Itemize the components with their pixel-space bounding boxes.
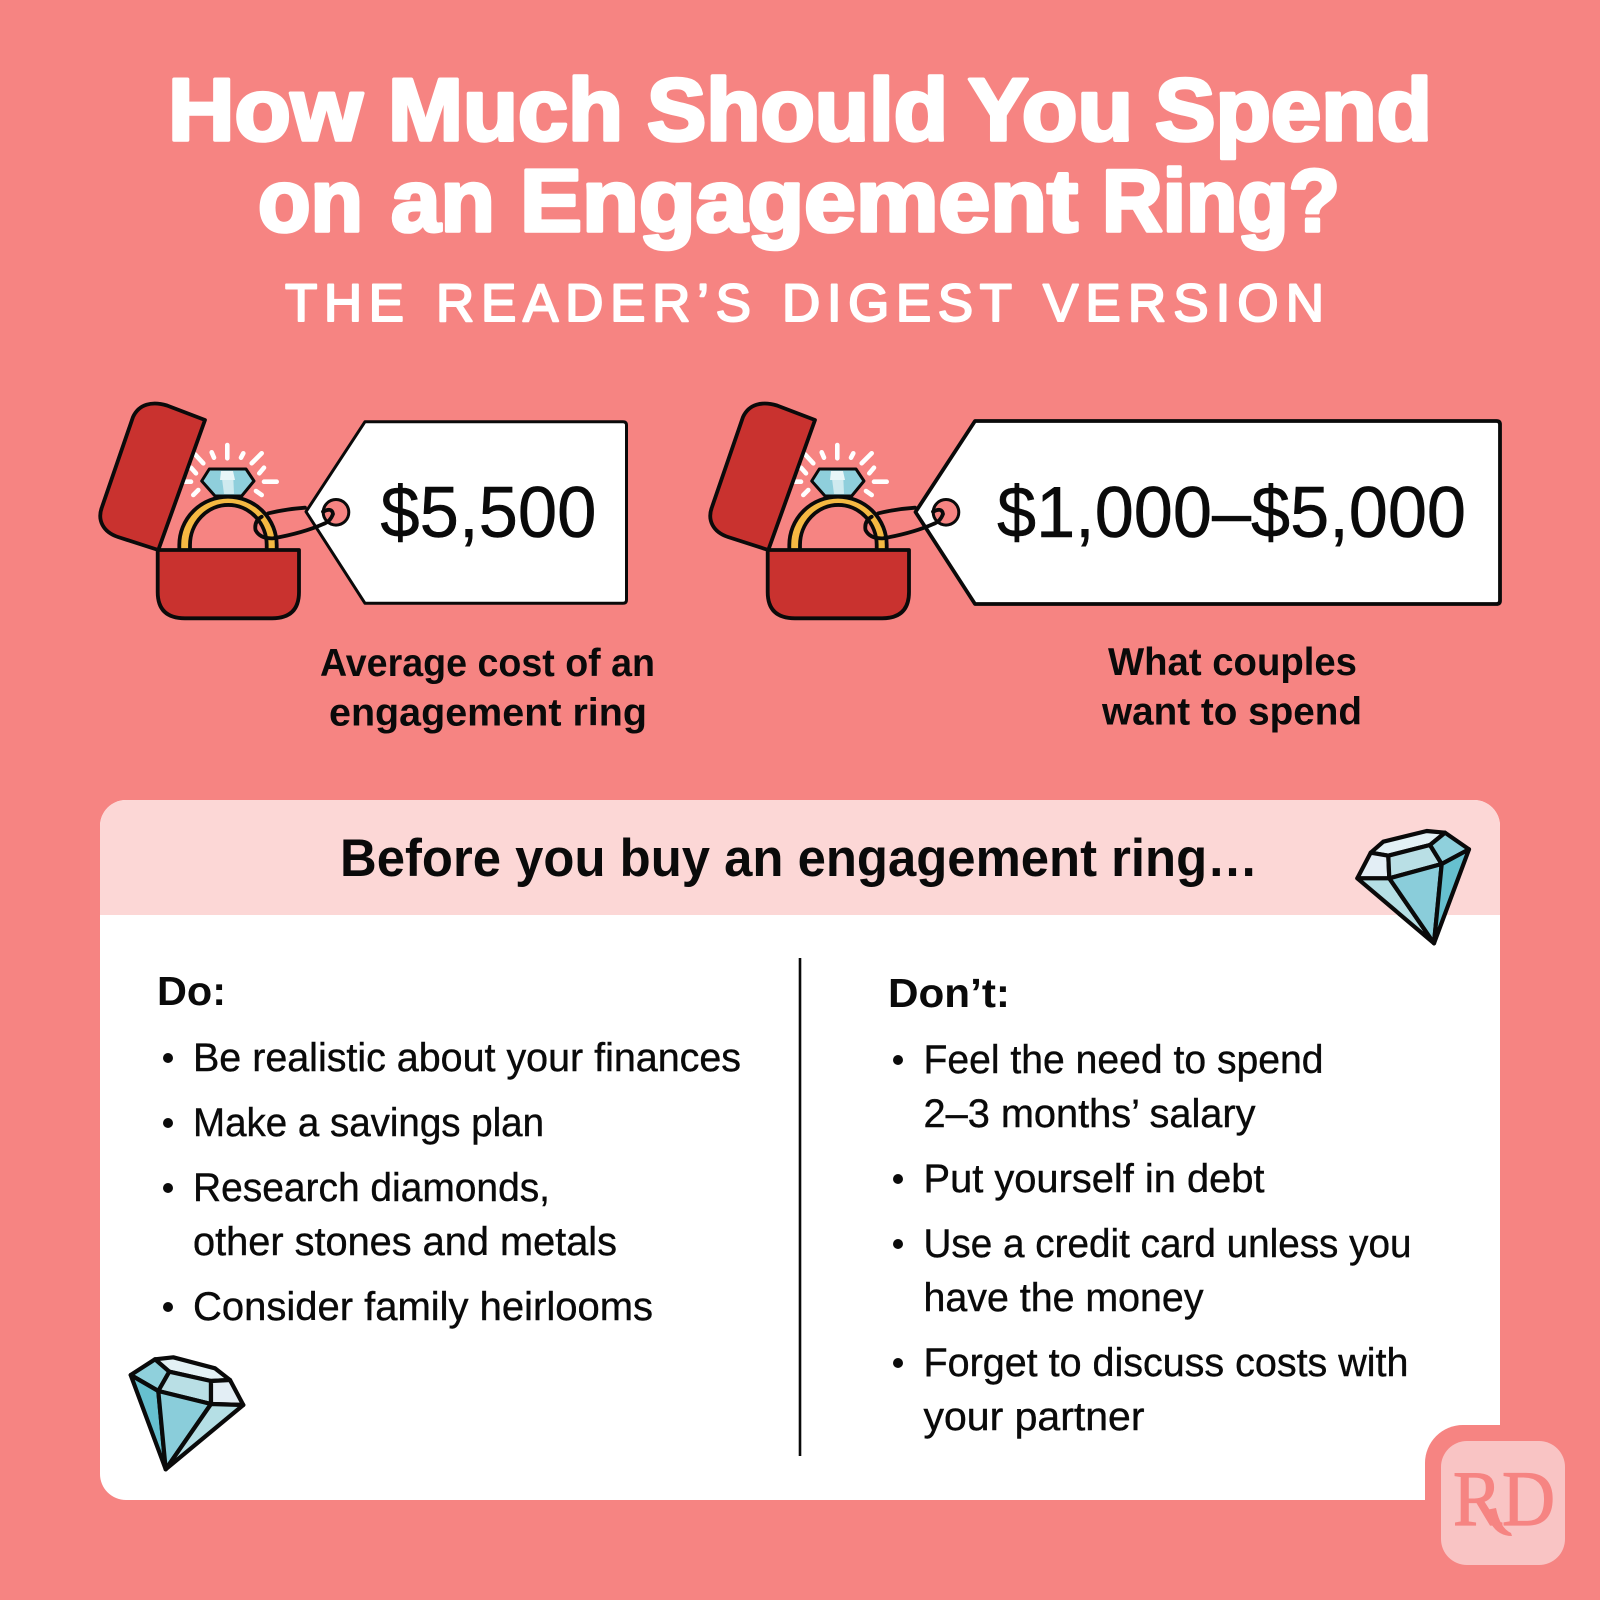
price tag: $1,000–$5,000: $1,000–$5,000 — [997, 473, 1466, 553]
label: average cost — [320, 642, 655, 734]
don't list: Use a credit card unless you — [924, 1222, 1412, 1266]
title: on — [258, 151, 363, 250]
logo notch — [1425, 1425, 1500, 1500]
label: average cost: engagement ring — [329, 692, 647, 734]
do list: Be realistic about your finances — [193, 1036, 741, 1080]
panel: before you buy — [100, 800, 1500, 1500]
icon: diamond bottom left — [131, 1357, 243, 1469]
sparkles — [185, 445, 277, 495]
don't list: Feel the need to spend — [924, 1038, 1324, 1082]
column: don't — [888, 970, 1412, 1439]
ring box base — [768, 550, 909, 618]
subtitle: VERSION — [1043, 274, 1324, 333]
subtitle: DIGEST — [782, 274, 1012, 333]
do list: Research diamonds, — [193, 1166, 550, 1210]
upper tag string — [268, 508, 305, 513]
label: what couples want to spend — [1101, 641, 1362, 734]
ring box lid — [100, 404, 205, 550]
label: what couples want to spend: want to spend — [1101, 690, 1362, 734]
do list: Make a savings plan — [193, 1101, 544, 1145]
subtitle: READER’S — [436, 274, 751, 333]
title: You — [968, 60, 1133, 159]
don't list: Forget to discuss costs with — [924, 1341, 1408, 1385]
icon: diamond top right — [1357, 831, 1469, 943]
price tag: $5,500 — [255, 422, 626, 603]
label: average cost: Average cost of an — [320, 642, 655, 685]
label: what couples want to spend: What couples — [1108, 641, 1357, 684]
logo: RD: RD — [1453, 1455, 1555, 1542]
icon: ring box with price tag, average cost — [100, 404, 305, 618]
title: Engagement — [520, 151, 1078, 250]
price tag: $1,000–$5,000 — [865, 421, 1500, 604]
title: Spend — [1155, 60, 1432, 159]
title: How — [168, 60, 363, 159]
title: Should — [647, 60, 948, 159]
logo: RD — [1441, 1441, 1565, 1565]
sparkles — [795, 445, 887, 495]
title: Much — [388, 60, 623, 159]
do list — [163, 1036, 741, 1329]
subtitle: THE — [285, 274, 404, 333]
icon: ring box with price tag, what couples want — [710, 404, 915, 618]
don't list: have the money — [924, 1276, 1204, 1320]
do heading: Do: — [157, 968, 226, 1014]
panel body — [100, 800, 1500, 1500]
do list: Consider family heirlooms — [193, 1285, 653, 1329]
don't list: your partner — [924, 1395, 1144, 1439]
ring box lid — [710, 404, 815, 550]
gold ring band — [789, 497, 887, 552]
column divider — [799, 958, 801, 1456]
title: Ring? — [1102, 151, 1340, 250]
don't list: Put yourself in debt — [924, 1157, 1265, 1201]
do list: other stones and metals — [193, 1220, 617, 1264]
ring box base — [158, 550, 299, 618]
gold ring band — [179, 497, 277, 552]
don't heading: Don’t: — [888, 970, 1010, 1016]
don't list: 2–3 months’ salary — [924, 1092, 1256, 1136]
title: an — [391, 151, 495, 250]
price tag: $5,500: $5,500 — [380, 473, 596, 553]
title — [168, 60, 1432, 250]
subtitle — [285, 274, 1324, 333]
column: do — [157, 968, 741, 1329]
panel heading: Before you buy an engagement ring… — [340, 829, 1258, 888]
panel header band — [100, 800, 1500, 915]
diamond on ring — [202, 469, 254, 496]
diamond on ring — [812, 469, 864, 496]
upper tag string — [878, 508, 915, 513]
don't list — [893, 1038, 1412, 1439]
